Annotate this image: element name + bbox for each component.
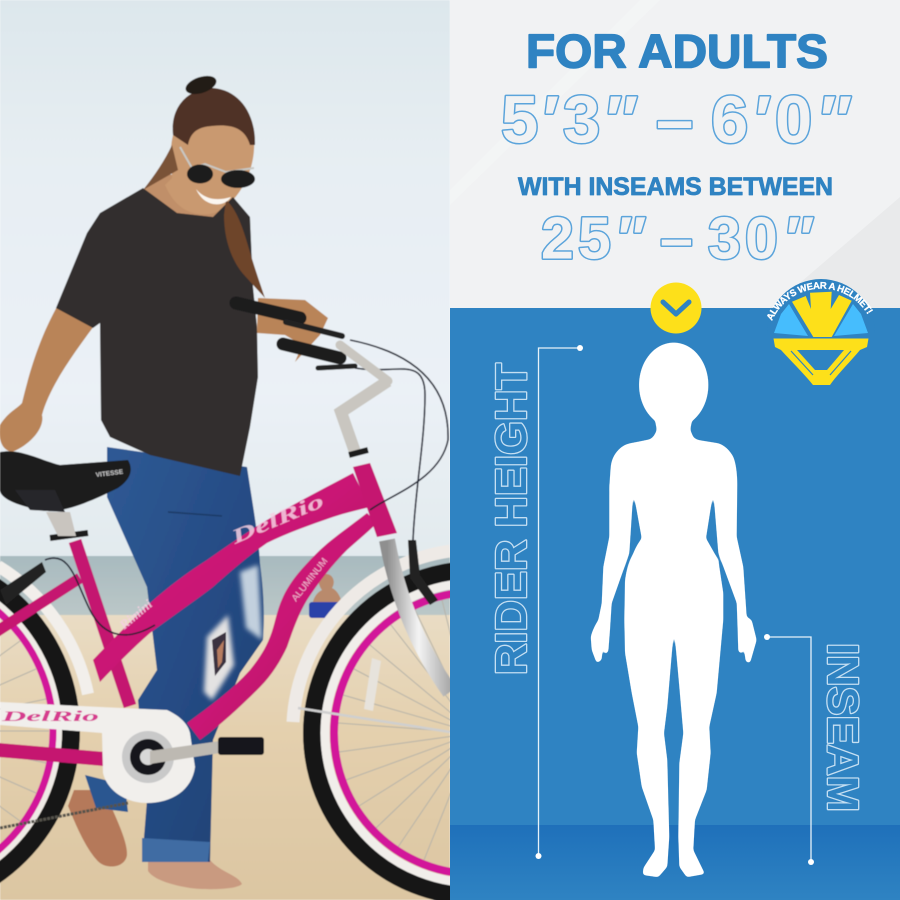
- sky: [0, 0, 450, 560]
- rider height bracket: [536, 345, 583, 859]
- sunglasses: [180, 147, 255, 188]
- bar lettering: [115, 490, 330, 633]
- down tube: [187, 513, 377, 740]
- floor band: [450, 825, 900, 900]
- pocket seam: [168, 512, 222, 516]
- fork: [387, 540, 450, 692]
- DelRio on top tube: DelRio: [227, 490, 327, 549]
- Rimini on top tube: Rimini: [115, 596, 155, 633]
- top tube: [93, 473, 370, 682]
- silhouette body: [591, 422, 757, 877]
- ALUMINUM on down tube: ALUMINUM: [290, 556, 330, 604]
- dark t-shirt: [56, 188, 258, 476]
- heading: for adults: FOR ADULTS: [526, 24, 828, 78]
- collars: [50, 450, 368, 538]
- helmet rim and straps: [774, 338, 868, 385]
- DelRio on chain guard: DelRio: [0, 709, 99, 725]
- handlebar grips and levers: [236, 303, 388, 381]
- rider height vertical label: RIDER HEIGHT: [487, 363, 536, 675]
- saddle brand: VITESSE: [95, 469, 124, 479]
- torn knee fray: [204, 615, 234, 700]
- badge lettering: ALWAYS WEAR A HELMET!: [767, 282, 873, 321]
- inseam bracket: [764, 634, 814, 865]
- strap opening: [797, 350, 844, 370]
- photo: woman with pink bicycle on the beach: [0, 0, 450, 900]
- brake clamp: [408, 540, 438, 605]
- helmet side vents: [774, 304, 868, 336]
- seat stay: [0, 578, 80, 632]
- icon: yellow chevron badge: [650, 282, 702, 334]
- helmet dome backing: [767, 279, 875, 333]
- strap inner lines: [791, 351, 851, 375]
- saddle: [0, 451, 131, 536]
- sand: [0, 615, 450, 900]
- icon: helmet badge: [767, 279, 873, 385]
- stem: [341, 381, 388, 452]
- left arm and hand: [0, 308, 93, 452]
- background sunbather: [309, 574, 342, 618]
- panel: light header background: [450, 0, 900, 308]
- smile: [196, 189, 231, 204]
- subheading: with inseams between: WITH INSEAMS BETWEEN: [518, 173, 833, 201]
- inseam vertical label: INSEAM: [818, 643, 867, 812]
- brake and gear cluster at rear: [0, 562, 46, 605]
- rear wheel: [0, 556, 88, 900]
- bicycle frame: [0, 340, 450, 759]
- body silhouette: [591, 342, 757, 877]
- neck: [144, 174, 220, 218]
- helmet centre shell: [792, 292, 852, 337]
- panel: blue measurement area: [450, 308, 900, 900]
- silhouette head: [639, 342, 708, 428]
- face: [166, 124, 255, 214]
- rider height range: 5′3″ – 6′0″: [501, 82, 852, 158]
- chain guard: [0, 702, 264, 828]
- jeans: [85, 447, 264, 862]
- right forearm: [257, 298, 328, 362]
- head tube: [353, 463, 397, 537]
- hair and bun: [143, 72, 265, 298]
- chain stay: [0, 750, 104, 759]
- seat tube: [75, 541, 130, 706]
- bare back foot: [68, 790, 127, 867]
- front wheel: [286, 546, 450, 900]
- inseam range: 25″ – 30″: [541, 206, 814, 272]
- brake cables: [45, 340, 448, 635]
- front foot: [148, 860, 242, 889]
- sea: [0, 556, 450, 618]
